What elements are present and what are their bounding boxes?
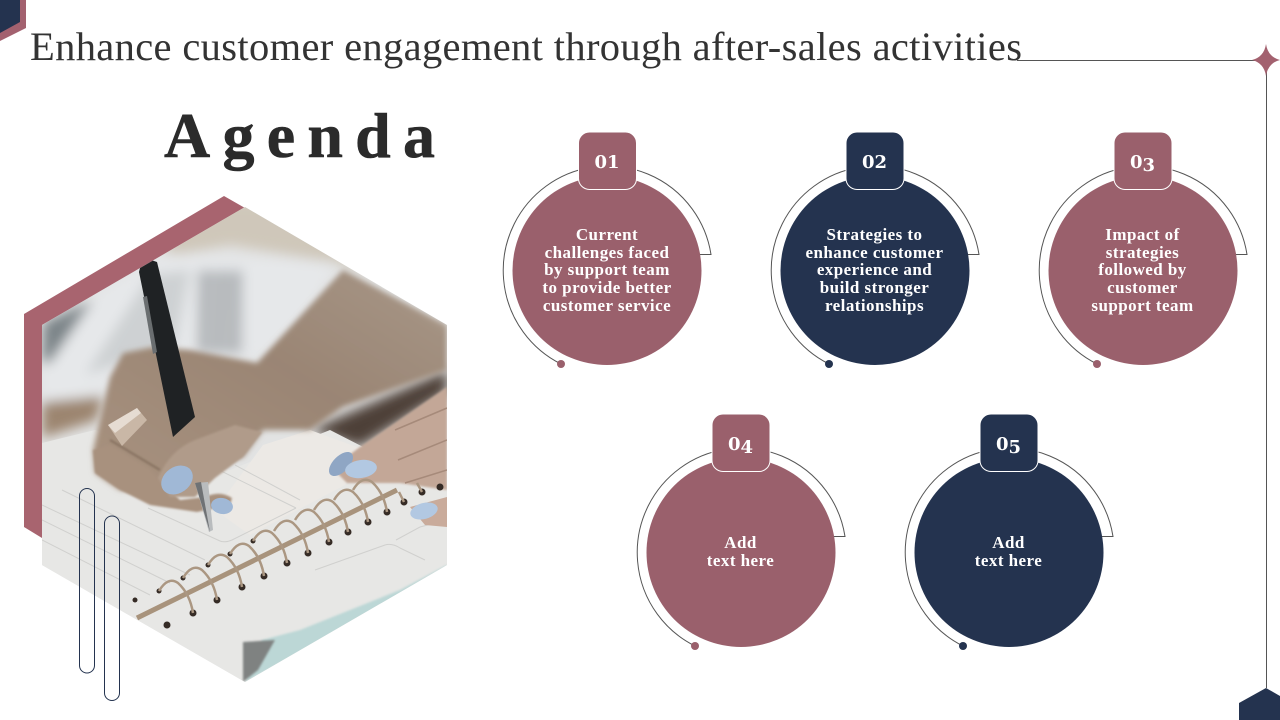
- agenda item 01: customer service: [543, 296, 671, 315]
- icon: four-point star: [1252, 44, 1280, 76]
- agenda item 02: build stronger: [820, 278, 929, 297]
- agenda item 01: challenges faced: [545, 243, 669, 262]
- agenda item 03: support team: [1091, 296, 1194, 315]
- teal object: [245, 565, 447, 682]
- agenda item 02: relationships: [825, 296, 924, 315]
- agenda item 03: [1039, 132, 1247, 368]
- lower finger: [410, 497, 447, 527]
- agenda item 03: 3: [1142, 155, 1155, 176]
- spiral binding: [137, 490, 397, 618]
- title: Enhance customer engagement through after-sales activities: [30, 24, 1022, 69]
- agenda item 02: 02: [862, 152, 887, 173]
- agenda item 04: Add: [724, 533, 757, 552]
- agenda item 05: 0: [996, 434, 1008, 455]
- agenda item 02: [771, 132, 979, 368]
- corner hexagon: bottom right: [1239, 688, 1280, 720]
- agenda item 03: 0: [1130, 152, 1142, 173]
- agenda item 05: [905, 414, 1113, 650]
- agenda item 03: strategies: [1106, 243, 1179, 262]
- agenda item 05: text here: [975, 551, 1042, 570]
- agenda item 03: Impact of: [1105, 225, 1180, 244]
- agenda item 04: [637, 414, 845, 650]
- fingers: [332, 387, 447, 490]
- corner hexagon: top left: [0, 0, 26, 41]
- agenda item 04: text here: [707, 551, 774, 570]
- agenda item 03: followed by: [1098, 260, 1187, 279]
- pen: [139, 260, 195, 437]
- nails: [161, 452, 438, 520]
- agenda item 05: 5: [1008, 437, 1021, 458]
- agenda item 01: to provide better: [542, 278, 672, 297]
- agenda item 02: Strategies to: [826, 225, 923, 244]
- decorative pill outlines: [80, 488, 120, 700]
- lower fist and thumb: [93, 445, 232, 512]
- agenda item 05: Add: [992, 533, 1025, 552]
- frame line: [1017, 60, 1266, 688]
- photo: hand writing in a spiral notebook: [42, 200, 460, 690]
- agenda item 04: 4: [740, 437, 753, 458]
- agenda item 02: experience and: [817, 260, 932, 279]
- agenda item 01: 01: [594, 152, 620, 173]
- agenda item 02: enhance customer: [806, 243, 943, 262]
- agenda item 01: Current: [576, 225, 638, 244]
- agenda item 04: 0: [728, 434, 740, 455]
- hexagon backing shape: [24, 196, 245, 538]
- heading: Agenda: Agenda: [164, 100, 435, 171]
- agenda item 01: by support team: [544, 260, 670, 279]
- agenda item 01: [503, 132, 711, 368]
- notebook: [42, 430, 362, 448]
- ring: [108, 408, 147, 446]
- arm and hand: [93, 270, 447, 490]
- agenda item 03: customer: [1107, 278, 1178, 297]
